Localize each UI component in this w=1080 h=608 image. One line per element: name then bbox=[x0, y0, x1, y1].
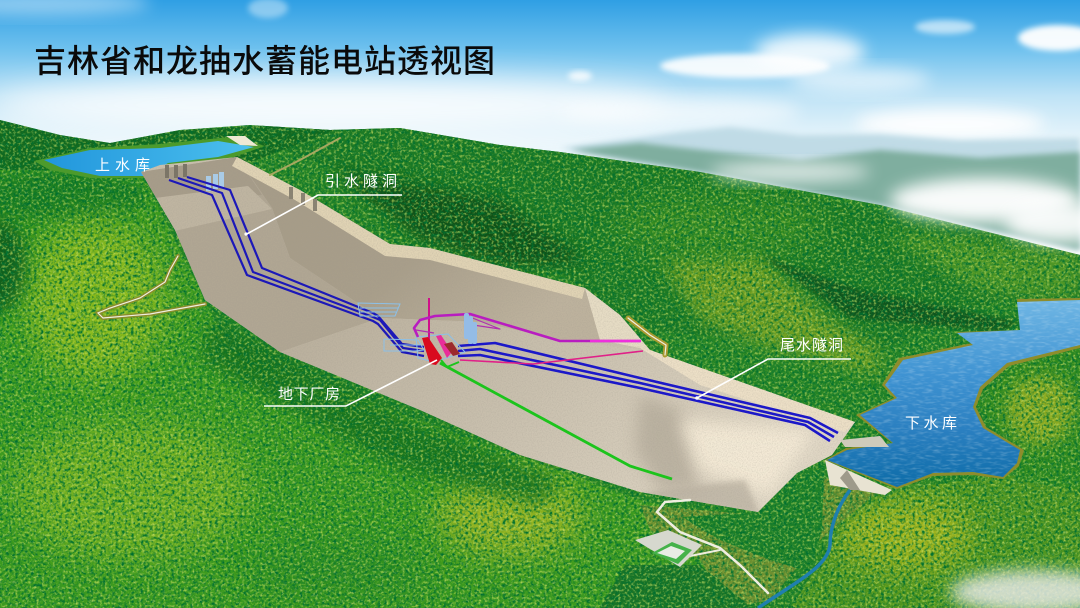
right wall in light bbox=[585, 288, 650, 350]
label: upper reservoir: 上水库 bbox=[95, 157, 150, 174]
lower reservoir water bbox=[827, 300, 1080, 487]
surge shafts bbox=[464, 313, 477, 344]
wireframe gate chambers bbox=[358, 303, 465, 362]
substation yard bbox=[635, 530, 702, 567]
hill: lower right peninsula bbox=[790, 475, 1080, 608]
sunlit floor patch bbox=[680, 420, 815, 495]
upper slope floor bbox=[141, 157, 380, 352]
top rim bbox=[232, 157, 585, 299]
patch: sunlit right hillside bbox=[660, 255, 880, 375]
hill: right shore bbox=[975, 345, 1080, 490]
rock grain texture bbox=[140, 155, 860, 515]
intake towers bbox=[165, 164, 317, 211]
patch: yellow left bbox=[25, 220, 165, 380]
patch: yellow bottom centre bbox=[435, 473, 585, 557]
clouds bbox=[0, 0, 1080, 139]
lower reservoir bbox=[820, 295, 1080, 490]
lit floor band bbox=[280, 318, 855, 512]
patch: dark upper left slope bbox=[0, 170, 150, 220]
patch: yellow peninsula bbox=[835, 499, 975, 571]
underground powerhouse bbox=[422, 335, 460, 365]
label: tailrace tunnel: 尾水隧洞 bbox=[780, 337, 843, 354]
patch: bottom mid forest bbox=[267, 546, 413, 594]
upper back wall bbox=[237, 157, 600, 340]
excavation base bbox=[141, 157, 855, 512]
shadow: along excavation bbox=[200, 320, 560, 505]
cable and ventilation tunnels bbox=[414, 298, 643, 364]
grey strip bottom bbox=[640, 480, 760, 515]
grey shadow in lower floor bbox=[635, 395, 700, 490]
label: headrace tunnel bbox=[244, 173, 402, 236]
patch: far right ridge bbox=[880, 230, 1080, 300]
forest block below excavation bbox=[682, 470, 824, 572]
label: underground powerhouse bbox=[264, 360, 437, 406]
mist: right clouds bbox=[710, 162, 1080, 608]
excavated cross-section bbox=[140, 155, 860, 515]
hill: left slope bbox=[0, 165, 760, 608]
lower reservoir bank bbox=[825, 298, 1080, 489]
sky background bbox=[0, 0, 1080, 175]
tailrace strip in light bbox=[640, 348, 855, 432]
shadow: left edge bbox=[0, 219, 26, 311]
patch: upper right hillside bbox=[610, 195, 830, 255]
forest bottom block bbox=[600, 565, 752, 608]
label: tailrace tunnel bbox=[695, 337, 851, 400]
upper reservoir bbox=[34, 136, 265, 178]
valley ground bbox=[640, 475, 880, 608]
rim piers bbox=[289, 187, 317, 211]
label: lower reservoir: 下水库 bbox=[905, 415, 957, 432]
upper reservoir water bbox=[44, 141, 254, 176]
hill: top left dark bbox=[0, 120, 340, 170]
water ripples bbox=[820, 295, 1080, 490]
shadow: behind excavation bbox=[330, 170, 590, 268]
hill: upper right forest bbox=[230, 128, 1080, 350]
lower dam structures bbox=[825, 436, 892, 495]
title: 吉林省和龙抽水蓄能电站透视图 bbox=[34, 43, 495, 79]
upper gate piers bbox=[165, 164, 187, 178]
patch: yellow lower bbox=[10, 420, 250, 560]
patch: right shore yellow bbox=[1005, 375, 1075, 445]
upper intake wall bbox=[141, 157, 262, 198]
headrace tunnels bbox=[169, 177, 424, 356]
shadow: ridge lines bbox=[760, 255, 1020, 332]
label: headrace tunnel: 引水隧洞 bbox=[325, 173, 397, 190]
upper bench bbox=[155, 186, 272, 232]
surge shafts upper bbox=[206, 172, 224, 191]
river bbox=[758, 490, 850, 608]
distant mountains bbox=[560, 127, 1080, 250]
tailrace tunnels bbox=[458, 343, 838, 441]
label: underground powerhouse: 地下厂房 bbox=[278, 386, 340, 403]
access tunnel green bbox=[440, 360, 672, 479]
dam snow patch bbox=[226, 136, 258, 146]
upper reservoir bank bbox=[34, 137, 265, 178]
access roads bbox=[98, 138, 768, 593]
